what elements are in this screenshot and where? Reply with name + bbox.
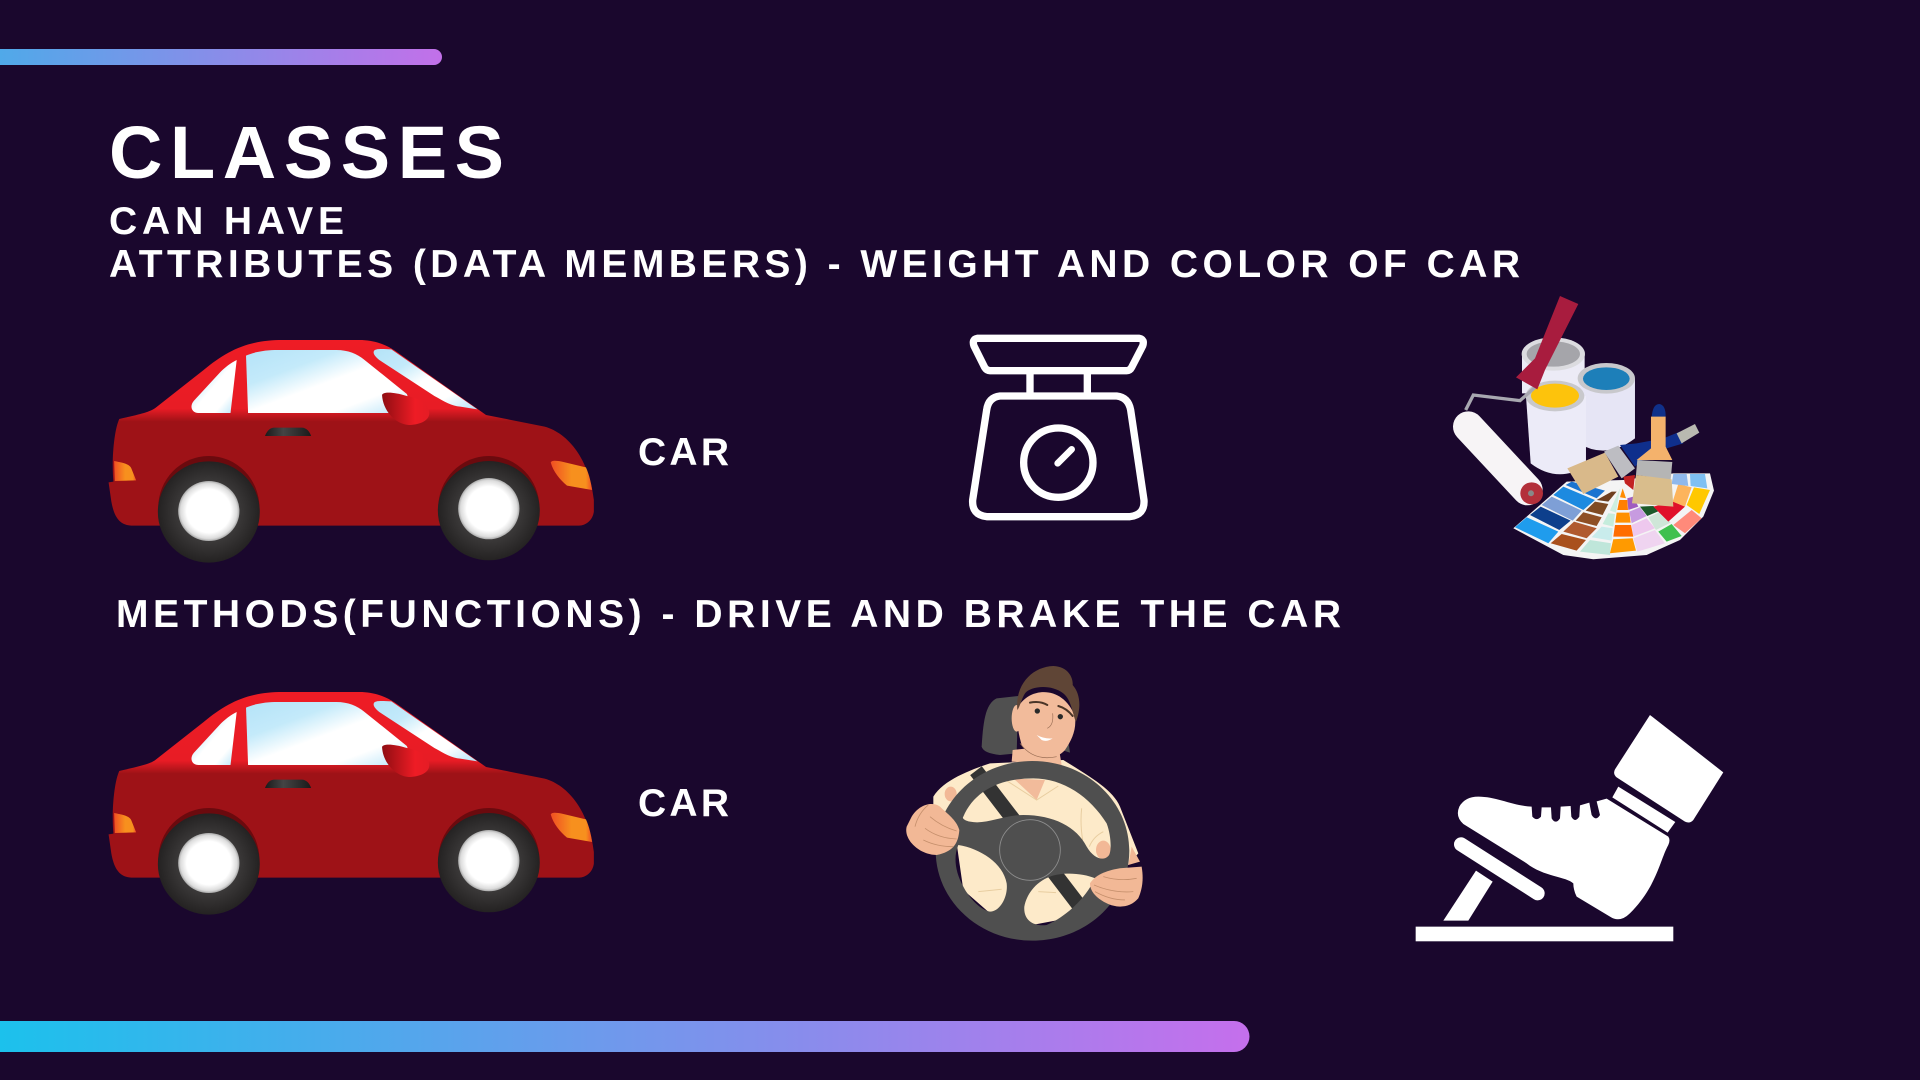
heading: methods: METHODS(FUNCTIONS) - DRIVE AND BRAKE THE CAR	[116, 593, 1341, 636]
subtitle: can have: CAN HAVE	[109, 200, 344, 243]
label: car (methods row): CAR	[638, 782, 729, 825]
icon: foot pressing brake pedal	[1416, 715, 1723, 941]
car illustration: attributes row	[109, 340, 594, 563]
label: car (attributes row): CAR	[638, 431, 729, 474]
top gradient bar	[0, 49, 442, 65]
icon: weighing scale	[973, 338, 1144, 517]
illustration: man driving	[906, 666, 1143, 941]
bottom gradient bar	[0, 1021, 1250, 1052]
heading: attributes: ATTRIBUTES (DATA MEMBERS) - WEIGHT AND COLOR OF CAR	[109, 243, 1520, 286]
car illustration: methods row	[109, 692, 594, 915]
title: CLASSES	[109, 111, 504, 194]
illustration: paint cans, roller, brushes and colour fan	[1466, 296, 1714, 559]
